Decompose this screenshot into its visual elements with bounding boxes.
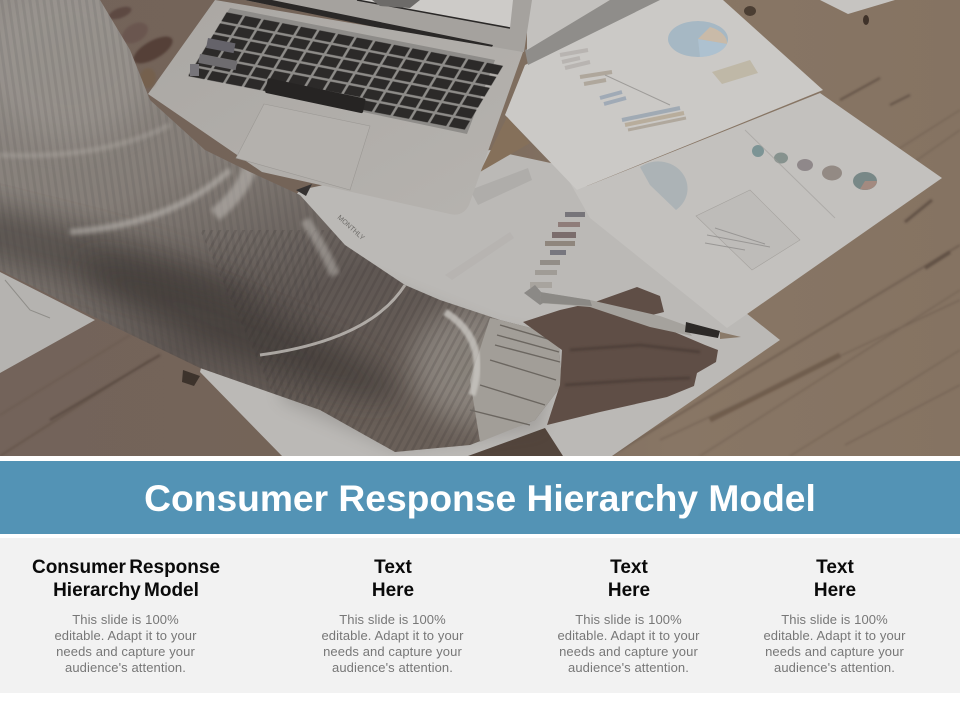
column 3: Text Here (557, 557, 700, 675)
hand shading (565, 345, 700, 385)
column 4: Text Here: Here (814, 580, 856, 601)
column 1: Consumer Response Hierarchy Model: This slide is 100% (72, 612, 179, 627)
paper: right sheet with pie row and gauges (560, 93, 942, 328)
column 1: Consumer Response Hierarchy Model: editable. Adapt it to your (54, 628, 197, 643)
column 2: Text Here: audience's attention. (332, 660, 453, 675)
keyboard (186, 11, 505, 131)
right hand (523, 287, 718, 425)
column 3: Text Here: This slide is 100% (575, 612, 682, 627)
title band (0, 461, 960, 534)
column 3: Text Here: Here (608, 580, 650, 601)
column 1: Consumer Response Hierarchy Model: needs and capture your (56, 644, 195, 659)
column 3: Text Here: editable. Adapt it to your (557, 628, 700, 643)
shirt cuff (445, 312, 562, 442)
shadow under arm (280, 250, 560, 450)
column 4: Text Here: This slide is 100% (781, 612, 888, 627)
chart: bar groups (560, 50, 686, 130)
wood gap between laptop and papers (480, 117, 530, 172)
fountain pen (540, 292, 741, 339)
column 3: Text Here: Text (610, 557, 648, 578)
wooden table (0, 0, 960, 456)
column 1: Consumer Response Hierarchy Model: audience's attention. (65, 660, 186, 675)
column 3: Text Here: needs and capture your (559, 644, 698, 659)
column 4: Text Here: audience's attention. (774, 660, 895, 675)
column 4: Text Here: Text (816, 557, 854, 578)
laptop (148, 0, 532, 215)
laptop base (148, 0, 523, 215)
column 2: Text Here: This slide is 100% (339, 612, 446, 627)
paper: upper sheet with pie and bars (505, 0, 823, 190)
column 2: Text Here: needs and capture your (323, 644, 462, 659)
column 2: Text Here: editable. Adapt it to your (321, 628, 464, 643)
paper: left sheet with small chart (0, 272, 95, 373)
column 1: Consumer Response Hierarchy Model: Hierarchy Model (53, 580, 199, 601)
column 1: Consumer Response Hierarchy Model: Consumer Response (32, 557, 220, 578)
paper: large lower sheet with bar chart: MONTHLY (336, 214, 366, 242)
panel: text columns background (0, 538, 960, 693)
trackpad (236, 104, 370, 190)
column 3: Text Here: audience's attention. (568, 660, 689, 675)
photo: businessman reviewing charts at a desk with laptop (0, 0, 960, 456)
column 1: Consumer Response Hierarchy Model (32, 557, 220, 675)
column 2: Text Here: Here (372, 580, 414, 601)
column 4: Text Here (763, 557, 906, 675)
column 2: Text Here (321, 557, 464, 675)
striped shirt sleeve (0, 0, 580, 456)
column 4: Text Here: editable. Adapt it to your (763, 628, 906, 643)
chart: pie chart (668, 21, 728, 57)
paper: large lower sheet with bar chart (200, 150, 780, 456)
fingers of left hand (107, 4, 177, 88)
column 4: Text Here: needs and capture your (765, 644, 904, 659)
title: Consumer Response Hierarchy Model (144, 477, 816, 519)
laptop screen (245, 0, 532, 52)
column 2: Text Here: Text (374, 557, 412, 578)
